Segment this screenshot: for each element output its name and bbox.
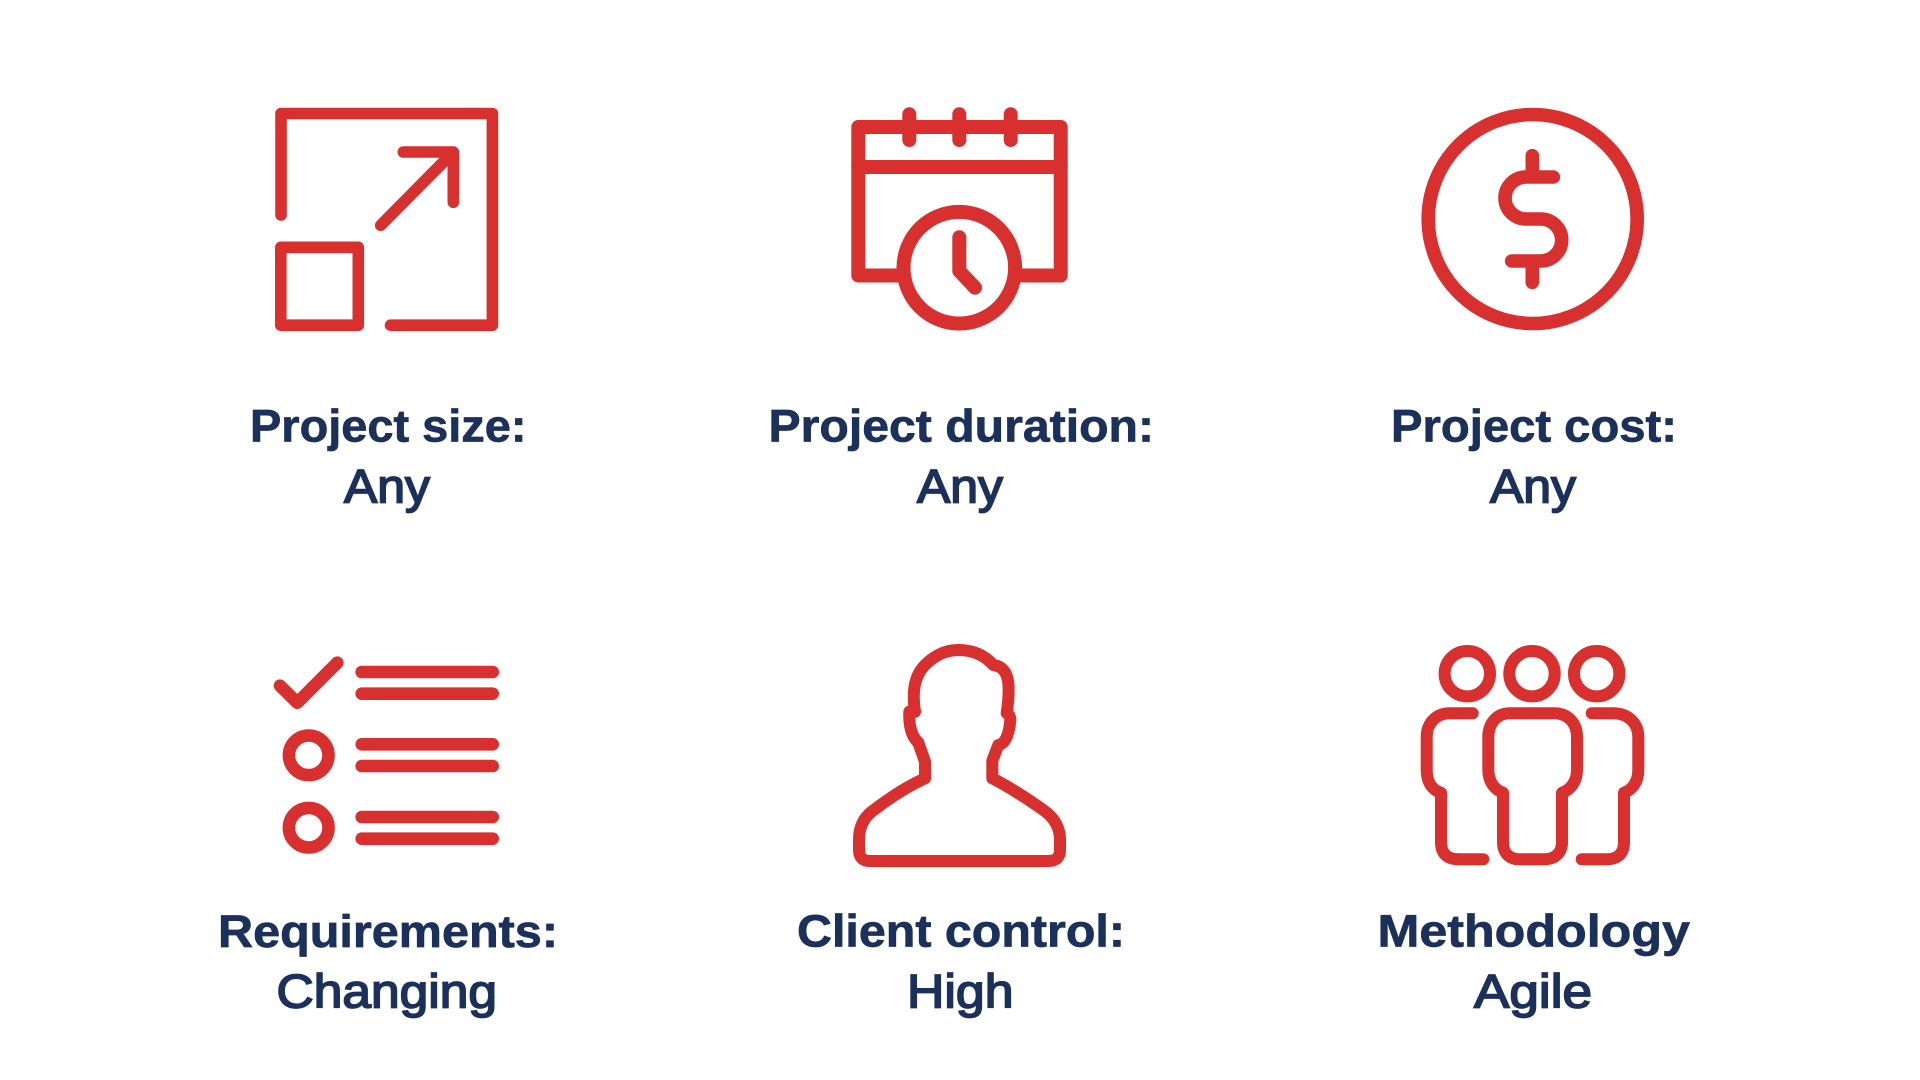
label: requirements: Requirements: [218,906,558,957]
icon: person silhouette [859,650,1060,861]
label: client control [797,906,1125,1018]
label: client control: Client control: [797,906,1125,957]
icon: resize square with arrow [281,114,492,325]
label: project duration: Any [917,460,1004,513]
label: project cost: Any [1490,460,1577,513]
label: project duration [768,401,1154,513]
label: project size: Any [344,460,431,513]
icon: team of three people [1427,651,1638,859]
label: project cost [1391,401,1677,513]
label: project duration: Project duration: [768,401,1154,452]
panel: requirements [218,663,558,1018]
label: methodology [1378,906,1690,1018]
icon: checklist [280,663,493,848]
label: client control: High [907,964,1014,1018]
panel: methodology [1378,651,1690,1018]
icon: dollar coin [1428,114,1637,324]
label: requirements [218,906,558,1018]
label: methodology: Methodology [1378,906,1690,957]
icon: calendar with clock [858,114,1061,324]
label: project cost: Project cost: [1391,401,1677,452]
panel: project size [250,114,526,513]
panel: client control [797,650,1125,1018]
panel: project cost [1391,114,1677,513]
label: project size [250,401,526,513]
label: requirements: Changing [276,965,497,1018]
label: project size: Project size: [250,401,526,452]
label: methodology: Agile [1474,965,1592,1018]
panel: project duration [768,114,1154,513]
